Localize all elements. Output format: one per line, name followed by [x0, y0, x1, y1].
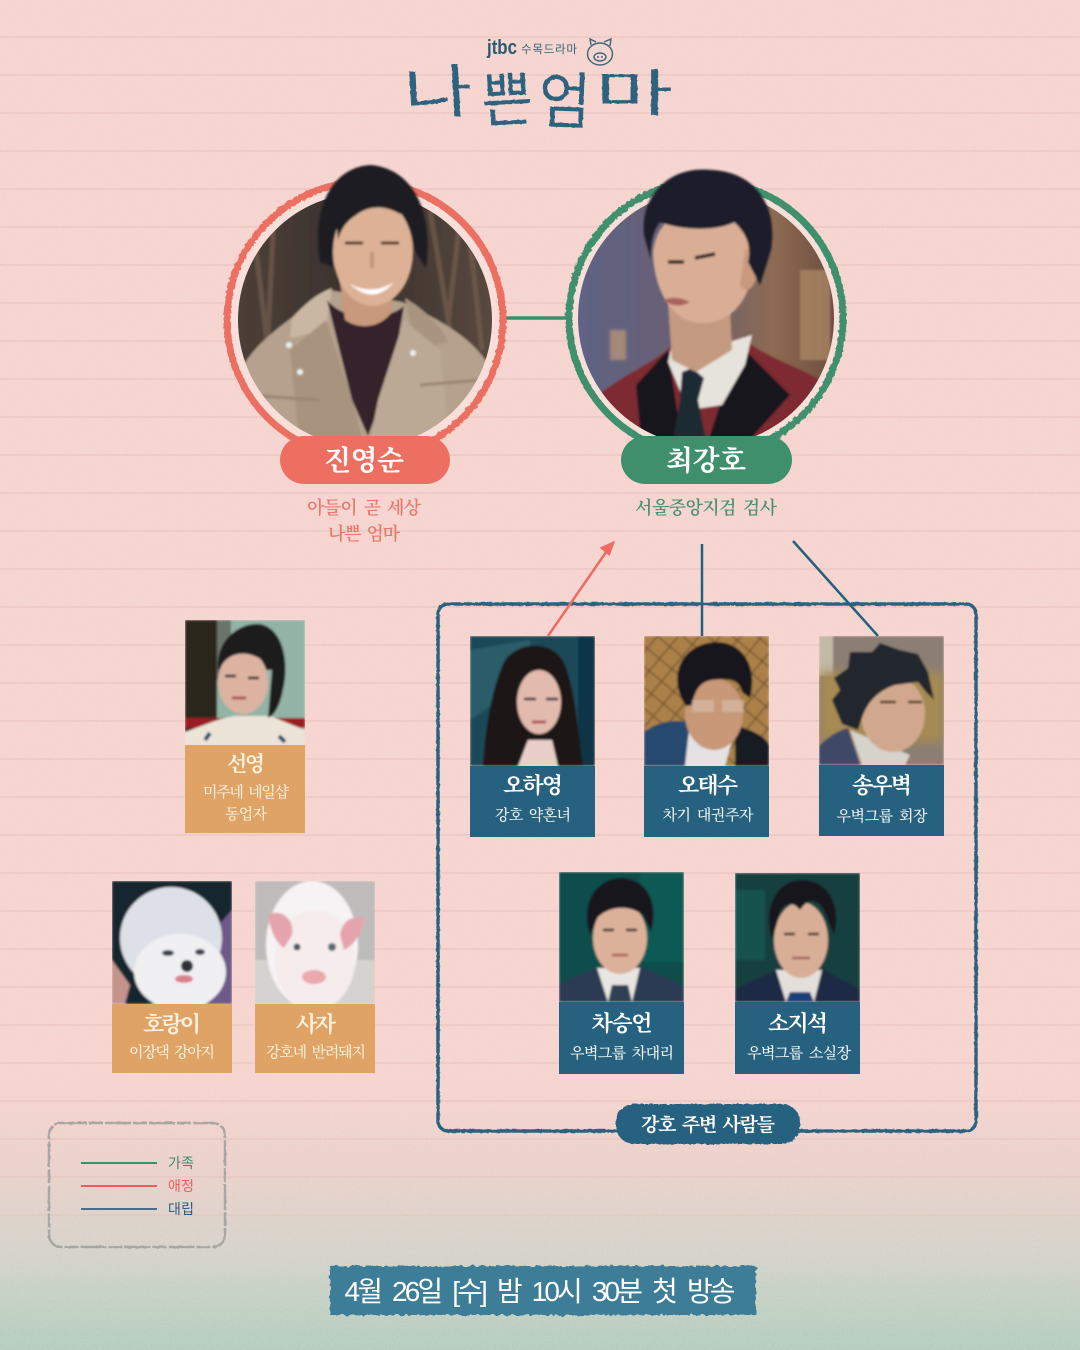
badge: group label: 강호 주변 사람들 — [641, 1113, 776, 1136]
broadcast date banner: 4월 26일 [수] 밤 10시 30분 첫 방송 — [344, 1276, 736, 1307]
coral ring — [227, 182, 503, 458]
portrait — [735, 873, 860, 1002]
legend: affection — [81, 1178, 194, 1194]
portrait — [559, 872, 684, 1002]
description — [307, 497, 422, 544]
card: Oh Ha-young — [470, 636, 595, 837]
portrait — [185, 620, 305, 745]
name pill — [621, 436, 792, 484]
title — [403, 59, 673, 138]
card: Oh Tae-su — [644, 636, 769, 837]
frame — [438, 604, 976, 1131]
card: Seon-young: 선영 — [227, 752, 265, 776]
broadcast date banner — [330, 1266, 756, 1315]
card: Tiger the dog: 이장댁 강아지 — [129, 1043, 215, 1061]
card: Lion the pig: 사자 — [296, 1012, 337, 1037]
green ring — [569, 181, 843, 455]
card: Tiger the dog: 호랑이 — [143, 1012, 201, 1037]
card: Lion the pig — [255, 881, 375, 1073]
portrait — [644, 636, 769, 766]
card: Oh Tae-su: 차기 대권주자 — [662, 806, 754, 824]
legend: conflict: 대립 — [168, 1201, 194, 1217]
portrait — [238, 163, 492, 436]
card: Song U-byeok: 우벽그룹 회장 — [836, 807, 928, 825]
connector: family line between leads — [505, 316, 569, 320]
title: 나 — [403, 59, 474, 128]
title: 엄 — [538, 67, 592, 138]
portrait — [255, 881, 375, 1010]
panel: people around Kang-ho — [438, 541, 976, 1144]
card: So Ji-seok — [735, 873, 860, 1074]
description: 아들이 곧 세상 — [307, 497, 422, 518]
character: Jin Young-soon — [227, 165, 503, 544]
portrait — [112, 881, 232, 1010]
name pill: 최강호 — [666, 445, 746, 477]
jtbc wordmark: jtbc — [486, 37, 517, 59]
portrait — [578, 168, 834, 436]
card: Tiger the dog — [112, 881, 232, 1073]
description: 나쁜 엄마 — [328, 523, 401, 544]
title: 쁜 — [480, 66, 535, 135]
character: Choi Kang-ho — [569, 169, 843, 518]
portrait — [470, 636, 595, 766]
logo: broadcaster and drama title — [403, 37, 673, 138]
card: Seon-young — [185, 620, 305, 833]
arrow: conflict line right — [793, 541, 878, 636]
card: So Ji-seok: 우벽그룹 소실장 — [747, 1044, 852, 1062]
card: So Ji-seok: 소지석 — [768, 1011, 828, 1036]
card: Oh Tae-su: 오태수 — [678, 773, 738, 798]
legend: affection: 애정 — [168, 1178, 194, 1194]
card: Seon-young: 미주네 네일샵 — [203, 783, 290, 801]
name pill: 진영순 — [324, 445, 404, 477]
legend: family — [81, 1155, 194, 1171]
card: Song U-byeok: 송우벽 — [852, 773, 912, 798]
weekday drama tag: 수목드라마 — [521, 43, 577, 56]
title: 마 — [595, 66, 673, 122]
card: Cha Seung-eon — [559, 872, 684, 1074]
legend: family: 가족 — [168, 1155, 194, 1171]
card: Cha Seung-eon: 우벽그룹 차대리 — [570, 1044, 674, 1062]
legend: conflict — [81, 1201, 194, 1217]
name pill — [280, 436, 450, 484]
card: Oh Ha-young: 강호 약혼녀 — [495, 806, 571, 824]
card: Lion the pig: 강호네 반려돼지 — [266, 1043, 366, 1061]
badge: group label — [616, 1104, 800, 1144]
arrow: conflict line center — [701, 544, 703, 636]
card: Oh Ha-young: 오하영 — [503, 773, 563, 798]
description: 서울중앙지검 검사 — [635, 497, 778, 518]
card: Cha Seung-eon: 차승언 — [592, 1011, 652, 1036]
card: Song U-byeok — [819, 636, 944, 836]
card: Seon-young: 동업자 — [225, 805, 268, 823]
portrait — [819, 636, 944, 765]
icon: pig face — [588, 39, 612, 65]
legend — [49, 1123, 225, 1247]
arrow: affection to Kang-ho — [548, 543, 613, 636]
